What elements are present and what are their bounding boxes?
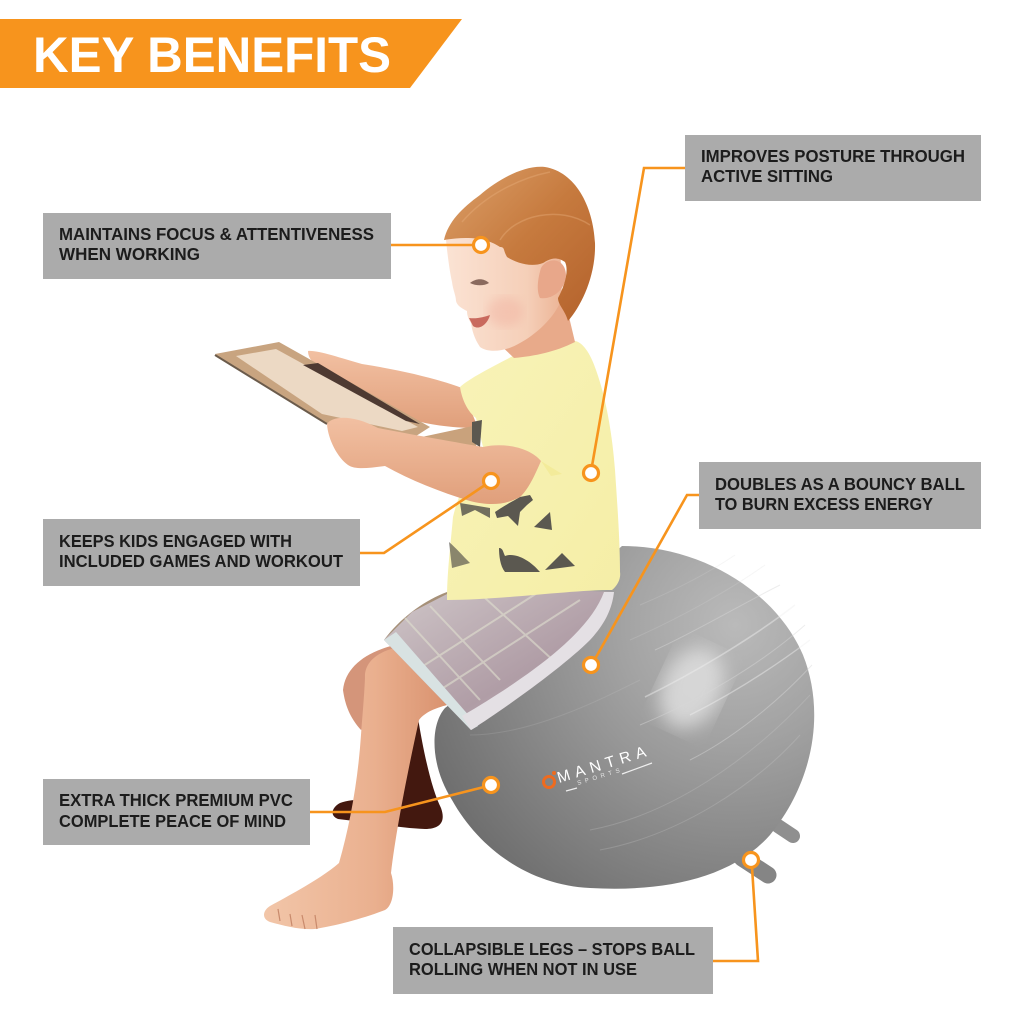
ball ribs: [470, 555, 812, 850]
ear: [538, 260, 566, 298]
face: [446, 225, 562, 351]
highlight on ball: [647, 637, 737, 739]
cheek blush: [487, 297, 523, 327]
t-shirt: [447, 341, 620, 600]
exercise ball: [435, 546, 814, 889]
callout: bouncy ball: [584, 462, 981, 672]
boy figure: [215, 167, 620, 929]
callout: improves posture: ACTIVE SITTING: [701, 166, 833, 186]
callout: bouncy ball: DOUBLES AS A BOUNCY BALL: [715, 474, 965, 494]
callout: premium PVC: [43, 778, 498, 845]
callout: maintains focus: MAINTAINS FOCUS & ATTENTIVENESS: [59, 224, 374, 244]
sleeve tip: [541, 461, 562, 476]
far foot and leg in shadow: [333, 718, 443, 829]
mouth: [469, 315, 490, 328]
eye: [470, 279, 489, 285]
callout: premium PVC: EXTRA THICK PREMIUM PVC: [59, 790, 293, 810]
hair: [444, 167, 595, 321]
callout: improves posture: IMPROVES POSTURE THROUGH: [701, 146, 965, 166]
title banner: KEY BENEFITS: KEY BENEFITS: [33, 27, 391, 83]
ball logo: Mantra Sports: MANTRA: [555, 743, 649, 787]
callout: maintains focus: [43, 213, 488, 279]
callout: collapsible legs: COLLAPSIBLE LEGS – STOPS BALL: [409, 939, 695, 959]
near leg and foot: [264, 648, 447, 929]
callout: keeps kids engaged: [43, 474, 498, 586]
callout: maintains focus: WHEN WORKING: [59, 244, 200, 264]
far knee: [343, 645, 395, 730]
callout: collapsible legs: [393, 852, 758, 994]
title banner: KEY BENEFITS: [0, 19, 462, 88]
callout: keeps kids engaged: KEEPS KIDS ENGAGED WITH: [59, 531, 292, 551]
callout: collapsible legs: ROLLING WHEN NOT IN USE: [409, 959, 637, 979]
callout: premium PVC: COMPLETE PEACE OF MIND: [59, 811, 286, 831]
collapsible ball legs: [742, 826, 793, 875]
callout: improves posture: [584, 135, 981, 480]
callout: keeps kids engaged: INCLUDED GAMES AND WORKOUT: [59, 551, 343, 571]
ball logo: Mantra Sports: SPORTS: [577, 768, 621, 787]
far arm: [308, 351, 478, 428]
shorts: [384, 588, 614, 730]
neck: [495, 300, 575, 358]
callout: bouncy ball: TO BURN EXCESS ENERGY: [715, 494, 933, 514]
near arm and hand: [327, 418, 541, 504]
tablet: [215, 342, 477, 450]
shirt dinosaur print: [449, 420, 575, 572]
